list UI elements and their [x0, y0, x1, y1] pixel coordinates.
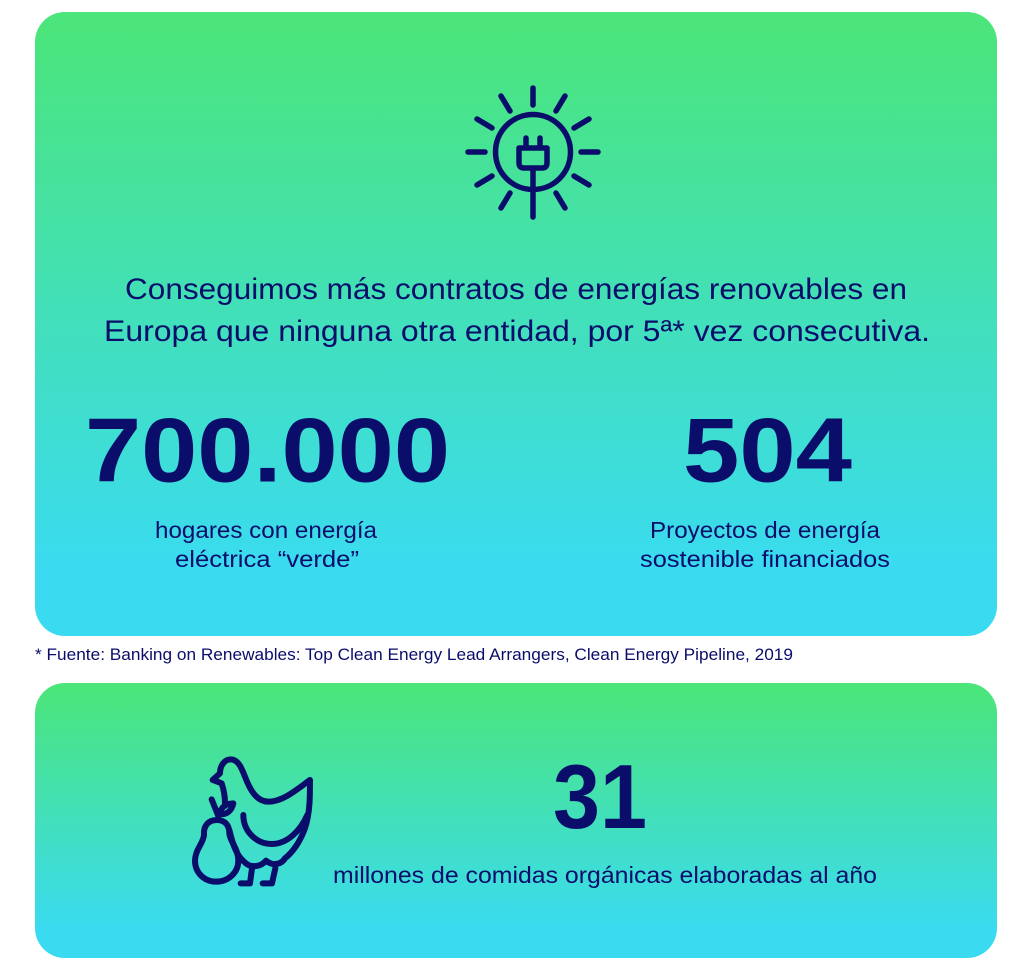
panel: organic meals	[35, 683, 997, 958]
stat: 700.000 homes: 700.000	[85, 400, 450, 502]
stat: 700.000 homes: eléctrica “verde”	[175, 546, 359, 572]
stat: 504 projects: 504	[683, 400, 852, 502]
stat: 504 projects: Proyectos de energía	[650, 517, 881, 543]
panel: renewable energy	[35, 12, 997, 636]
stat: 31: 31	[553, 747, 647, 848]
stat: 504 projects	[640, 400, 890, 572]
stat: 504 projects: sostenible financiados	[640, 546, 890, 572]
icon: hen and pear	[195, 759, 310, 883]
icon: sun with plug	[468, 88, 598, 217]
heading text: Conseguimos más contratos de energías renovables en	[125, 273, 907, 306]
stat: 700.000 homes	[85, 400, 450, 572]
heading text	[104, 273, 930, 348]
heading text: Europa que ninguna otra entidad, por 5ª* vez consecutiva.	[104, 315, 930, 348]
stat label: millones de comidas orgánicas elaboradas al año	[333, 862, 877, 888]
source footnote: * Fuente: Banking on Renewables: Top Clean Energy Lead Arrangers, Clean Energy Pipeline, 2019	[35, 646, 793, 664]
stat: 700.000 homes: hogares con energía	[155, 517, 378, 543]
